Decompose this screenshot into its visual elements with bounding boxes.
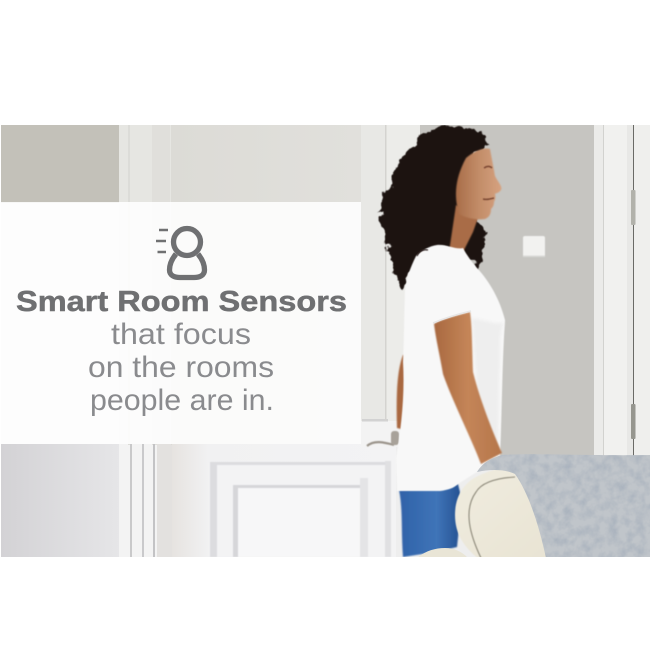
- t-shirt: [396, 245, 505, 491]
- armchair arm: [454, 470, 546, 557]
- door hinge upper: [631, 190, 636, 225]
- door handle: [367, 431, 399, 446]
- sofa cushion: [418, 548, 467, 557]
- body text: on the rooms: [88, 351, 274, 384]
- shirt shading: [474, 320, 500, 437]
- body text: that focus: [111, 318, 251, 351]
- door hinge lower: [631, 404, 636, 439]
- infographic canvas: [1, 125, 650, 557]
- jeans: [399, 484, 462, 557]
- back wall right: [420, 125, 594, 457]
- door upper moulding: [361, 125, 396, 444]
- door frame right: [603, 125, 634, 456]
- rear arm: [396, 354, 404, 430]
- body text: [88, 318, 274, 417]
- front arm: [434, 312, 502, 464]
- icon: person with motion lines: [156, 228, 204, 278]
- translucent text panel: [1, 202, 361, 444]
- hair strand over shoulder: [417, 250, 428, 256]
- blanket: [477, 454, 651, 558]
- photo base: [396, 447, 492, 557]
- door lower panel moulding: [209, 461, 391, 557]
- face: [456, 148, 501, 219]
- door upper: [171, 125, 361, 445]
- body text: people are in.: [90, 384, 274, 417]
- left wall lower: [1, 444, 121, 557]
- wall sensor: [523, 236, 545, 257]
- lips and eye: [483, 166, 494, 199]
- neck: [449, 205, 478, 252]
- door lower: [172, 444, 361, 557]
- sleeve edge: [433, 311, 471, 323]
- left wall upper: [1, 125, 119, 203]
- heading: Smart Room Sensors: [16, 286, 347, 318]
- person: [377, 126, 505, 557]
- photo: room scene: [1, 125, 651, 560]
- door frame left: [119, 125, 173, 557]
- hair: [377, 126, 490, 289]
